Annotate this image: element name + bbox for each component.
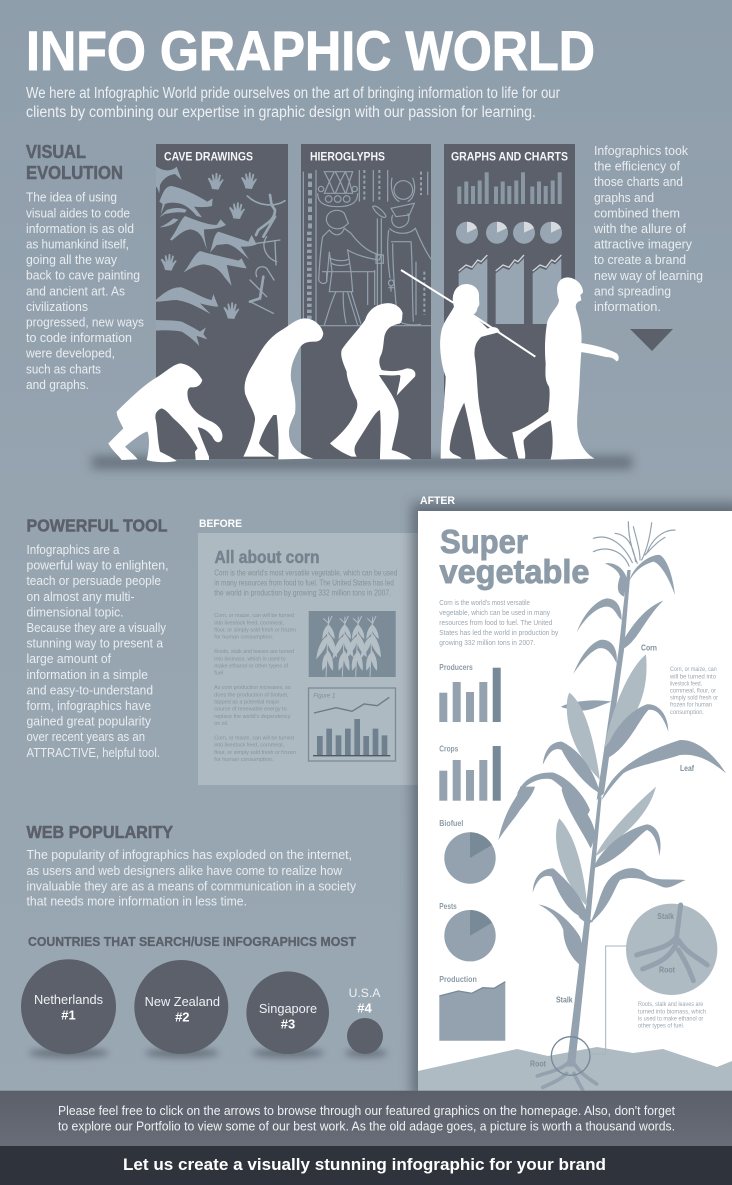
after: intro: growing 332 million tons in 2007.: [439, 638, 535, 647]
silhouette: early human: [330, 303, 415, 459]
before: body copy: replace the world's dependency: [214, 714, 290, 720]
bubble: New Zealand: [134, 960, 228, 1054]
heading: countries: COUNTRIES THAT SEARCH/USE INFOGRAPHICS MOST: [28, 935, 356, 949]
bubble: New Zealand: #2: [175, 1010, 190, 1024]
after: intro: Corn is the world's most versatile: [439, 598, 530, 607]
before: body copy: [214, 613, 296, 763]
after: producers bar chart: Producers: [439, 663, 473, 672]
after: root note: turned into biomass, which: [638, 1008, 706, 1015]
footer band: message: to explore our Portfolio to view some of our best work. As the old adage goes, a picture is worth a thousand words.: [58, 1119, 675, 1134]
before: body copy: tapped as a potential major: [214, 699, 279, 705]
after: corn note: [669, 666, 718, 716]
text: infographics took: new way of learning: [594, 268, 703, 283]
text: powerful tool: on almost any multi-: [26, 589, 134, 604]
before: body copy: Corn, or maize, can will be turned: [214, 735, 294, 741]
text: powerful tool: stunning way to present a: [26, 636, 164, 651]
text: infographics took: attractive imagery: [594, 237, 692, 252]
after: callout labels: [530, 644, 694, 1069]
before: body copy: make ethanol or other types of: [214, 664, 288, 670]
after: root note: is used to make ethanol or: [638, 1015, 703, 1022]
after: biofuel pie: [439, 819, 496, 884]
text: infographics took: and spreading: [594, 283, 671, 298]
before: body copy: into biomass, which is used to: [214, 656, 286, 662]
after: root note: [638, 1001, 706, 1029]
intro text: We here at Infographic World pride ourselves on the art of bringing information to life for our: [26, 85, 560, 102]
bubble: U.S.A: U.S.A: [349, 986, 381, 1000]
before: body copy: into livestock feed, cornmeal,: [214, 743, 284, 749]
bubble: U.S.A: [347, 986, 383, 1054]
before: intro: in many resources from food to fuel. The United States has led: [214, 578, 394, 588]
text: powerful tool: Because they are a visually: [26, 620, 166, 635]
text: powerful tool: gained great popularity: [26, 714, 151, 729]
after: title: vegetable: [440, 553, 590, 590]
text: powerful tool: powerful way to enlighten,: [26, 558, 168, 573]
silhouette: human with spear: [401, 270, 535, 459]
text: visual evolution: and ancient art. As: [26, 283, 125, 298]
bubble: Singapore: #3: [281, 1016, 295, 1032]
after: pests pie: Pests: [439, 902, 457, 911]
text: powerful tool: information in a simple: [26, 667, 148, 682]
before: heading: All about corn: [214, 547, 320, 567]
intro text: clients by combining our expertise in graphic design with our passion for learning.: [26, 104, 536, 121]
bubble: Netherlands: [21, 959, 116, 1054]
before: body copy: on oil.: [214, 721, 229, 727]
panel: before layout: BEFORE: [199, 518, 242, 530]
floor shadow under evolution figures: [92, 456, 632, 469]
footer band: message: Please feel free to click on the arrows to browse through our featured graphics on the homepage. Also, don't forget: [58, 1103, 675, 1118]
after: corn note: frozen for human: [670, 701, 712, 708]
panel: graphs and charts: GRAPHS AND CHARTS: [451, 150, 568, 164]
after: root note: other types of fuel.: [638, 1022, 685, 1029]
before: body copy: for human consumption.: [214, 635, 274, 641]
heading: visual evolution: EVOLUTION: [26, 163, 123, 183]
text: visual evolution: and graphs.: [26, 377, 89, 392]
text: visual evolution: such as charts: [26, 361, 101, 376]
after: corn note: cornmeal, flour, or: [670, 687, 716, 694]
before: body copy: does the production of biofuel,: [214, 692, 289, 698]
text: web popularity: that needs more information in less time.: [26, 894, 247, 909]
text: infographics took: information.: [594, 299, 661, 314]
text: visual evolution: were developed,: [25, 346, 115, 361]
silhouette: stooped hominid: [243, 318, 323, 459]
text: visual evolution: information is as old: [26, 221, 134, 236]
intro text: [26, 85, 560, 121]
text: infographics took: graphs and: [594, 190, 654, 205]
text: powerful tool: and easy-to-understand: [26, 682, 153, 697]
text: infographics took: the efficiency of: [594, 159, 680, 174]
after: biofuel pie: Biofuel: [439, 819, 463, 828]
text: powerful tool: Infographics are a: [26, 542, 120, 557]
text: powerful tool: dimensional topic.: [26, 604, 124, 619]
text: visual evolution: visual aides to code: [26, 205, 130, 220]
panel: graphs and charts: [444, 144, 575, 459]
text: web popularity: The popularity of infographics has exploded on the internet,: [26, 847, 352, 862]
before: body copy: Roots, stalk and leaves are turned: [214, 649, 294, 655]
after: production area chart: Production: [439, 975, 477, 984]
text: infographics took: [593, 143, 703, 314]
before: body copy: flour, or simply sold fresh or frozen: [214, 750, 296, 756]
after: callout labels: Corn: [641, 644, 657, 653]
before: body copy: flour, or simply sold fresh or frozen: [214, 628, 296, 634]
after: corn plant illustration: [498, 522, 726, 1090]
before: intro: [214, 569, 397, 598]
silhouette: modern human walking: [513, 278, 618, 459]
text: web popularity: as users and web designers alike have come to realize how: [26, 863, 342, 878]
text: visual evolution: [25, 190, 144, 392]
before: figure 1 chart: [308, 688, 396, 761]
egyptian figures and glyph columns: [303, 170, 436, 326]
text: visual evolution: civilizations: [26, 299, 88, 314]
heading: visual evolution: [26, 142, 123, 183]
before: body copy: for human consumption.: [214, 757, 274, 763]
before: body copy: As corn production increases, so: [214, 685, 291, 691]
plant: lower leaves, stalk and roots: [498, 783, 717, 1090]
text: infographics took: Infographics took: [594, 143, 688, 158]
text: infographics took: combined them: [594, 205, 680, 220]
panel: after layout: AFTER: [420, 495, 455, 507]
text: powerful tool: [26, 542, 168, 760]
after: ground: [418, 1047, 732, 1091]
before: figure 1 chart: Figure 1: [313, 694, 335, 700]
panel: after layout: [418, 495, 732, 1091]
bubble chart: countries: [21, 959, 387, 1058]
cave art: animals, hands and hunters: [156, 166, 285, 346]
text: visual evolution: going all the way: [26, 252, 117, 267]
title: INFO GRAPHIC WORLD: [26, 19, 595, 82]
text: visual evolution: The idea of using: [26, 190, 117, 205]
heading: web popularity: WEB POPULARITY: [26, 822, 173, 842]
plant: upper leaves and tassel: [517, 522, 726, 817]
text: powerful tool: form, infographics have: [26, 698, 151, 713]
text: visual evolution: as humankind itself,: [26, 236, 129, 252]
bubble: New Zealand: New Zealand: [145, 994, 220, 1009]
text: web popularity: invaluable they are as a means of communication in a society: [26, 879, 356, 894]
after: corn note: will be turned into: [669, 673, 717, 680]
evolution silhouettes: [108, 270, 618, 462]
after: intro: [439, 598, 558, 647]
text: infographics took: with the allure of: [593, 221, 686, 236]
panel: cave drawings: [156, 144, 288, 459]
footer band: message: [0, 1091, 732, 1146]
text: powerful tool: large amount of: [26, 651, 111, 666]
text: powerful tool: over recent years as an: [26, 729, 145, 744]
after: crops bar chart: Crops: [439, 745, 459, 754]
text: infographics took: those charts and: [594, 174, 683, 189]
after: title: [440, 523, 590, 590]
bubble: U.S.A: #4: [357, 1000, 372, 1016]
silhouette: crouching ape: [108, 363, 222, 462]
after: corn note: Corn, or maize, can: [670, 666, 717, 673]
panel: hieroglyphs: HIEROGLYPHS: [310, 150, 385, 164]
after: callout labels: Leaf: [680, 764, 694, 773]
footer band: call to action: Let us create a visually stunning infographic for your brand: [123, 1156, 606, 1174]
after: callout labels: Root: [659, 966, 675, 975]
mini bar charts: [457, 172, 562, 204]
footer band: call to action: [0, 1146, 732, 1185]
after: producers bar chart: [439, 663, 501, 722]
after: production area chart: [439, 975, 505, 1041]
panel: hieroglyphs: [301, 144, 436, 459]
shadow cast by after panel: [412, 503, 732, 1098]
before: body copy: source of renewable energy to: [214, 707, 287, 713]
bubble: Singapore: [246, 971, 329, 1054]
after: corn note: livestock feed,: [670, 680, 702, 687]
text: visual evolution: to code information: [26, 330, 132, 345]
after: title: Super: [440, 523, 528, 560]
after: callout labels: Stalk: [556, 996, 573, 1005]
panel: before layout: [198, 518, 418, 785]
before: body copy: Corn, or maize, can will be turned: [214, 613, 294, 619]
before: intro: the world in production by growing 332 million tons in 2007.: [214, 588, 391, 598]
text: infographics took: to create a brand: [594, 252, 686, 267]
text: visual evolution: back to cave painting: [26, 268, 140, 283]
after: callout labels: Stalk: [657, 912, 674, 921]
after: corn note: simply sold fresh or: [670, 694, 718, 701]
after: pests pie: [439, 902, 496, 961]
before: corn photo: [309, 611, 396, 677]
bubble: Singapore: Singapore: [259, 1001, 317, 1016]
mini area charts: [459, 255, 561, 324]
after: intro: States has led the world in production by: [439, 628, 558, 637]
after: corn note: consumption.: [670, 709, 704, 716]
after: callout labels: Root: [530, 1060, 546, 1069]
mini pie charts: [456, 222, 562, 244]
after: intro: vegetable, which can be used in many: [439, 608, 550, 617]
panel: cave drawings: CAVE DRAWINGS: [164, 150, 253, 164]
before: intro: Corn is the world's most versatile vegetable, which can be used: [214, 569, 397, 578]
text: powerful tool: teach or persuade people: [26, 573, 161, 588]
text: powerful tool: ATTRACTIVE, helpful tool.: [26, 745, 160, 760]
after: intro: resources from food to fuel. The United: [439, 618, 552, 627]
before: body copy: fuel.: [214, 671, 225, 677]
heading: visual evolution: VISUAL: [26, 142, 86, 162]
text: web popularity: [26, 847, 356, 909]
text: visual evolution: progressed, new ways: [26, 314, 144, 330]
bubble: Netherlands: #1: [61, 1008, 76, 1022]
bubble: Netherlands: Netherlands: [34, 992, 103, 1007]
arrow: down triangle: [630, 329, 673, 351]
before: body copy: into livestock feed, cornmeal,: [214, 620, 284, 626]
after: crops bar chart: [439, 745, 501, 801]
heading: powerful tool: POWERFUL TOOL: [26, 516, 168, 536]
after: root note: Roots, stalk and leaves are: [638, 1001, 704, 1008]
